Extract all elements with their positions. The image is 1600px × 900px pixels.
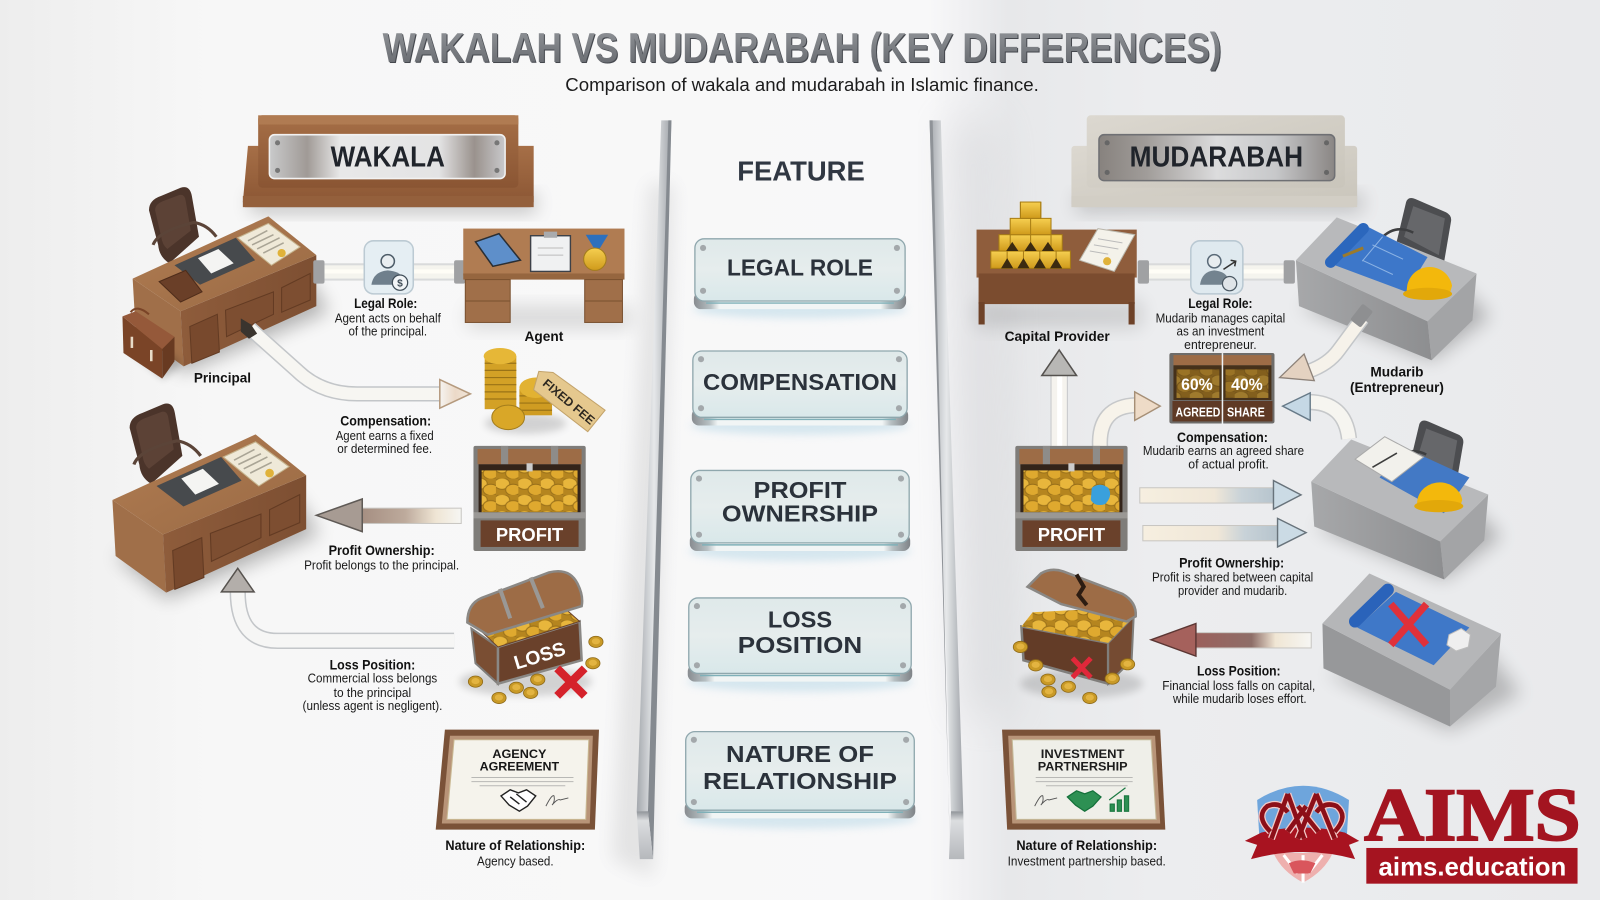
gold bars — [991, 251, 1070, 268]
wakala profit ownership text: Profit belongs to the principal. — [304, 557, 459, 572]
wakala legal role text — [335, 296, 441, 339]
arrow: profit to mudarib — [1143, 518, 1306, 547]
wakala legal role text: Agent acts on behalf — [335, 310, 441, 325]
plate: compensation: COMPENSATION — [703, 369, 897, 395]
mudarabah nature of relationship text — [1008, 838, 1166, 868]
AIMS logo — [1245, 774, 1581, 884]
website badge — [1366, 848, 1578, 884]
mudarib desk: profit — [1311, 421, 1501, 580]
wakala loss position text — [303, 657, 442, 713]
capital provider label: Capital Provider — [1005, 329, 1110, 344]
wakala loss position text: Commercial loss belongs — [308, 671, 437, 686]
arrow: profit to principal — [316, 499, 461, 532]
agreed share chest: 60% — [1181, 376, 1213, 394]
plate: loss position — [687, 598, 913, 692]
wakala profit ownership text — [304, 543, 459, 572]
mudarabah legal role text: Mudarib manages capital — [1156, 310, 1285, 325]
investment partnership certificate — [1002, 730, 1165, 830]
agreed share chest: SHARE — [1227, 404, 1265, 419]
mudarabah compensation text: Compensation: — [1177, 430, 1268, 445]
profit chest — [1015, 446, 1128, 551]
signature — [546, 796, 568, 806]
mudarabah compensation text — [1143, 430, 1304, 471]
wakala compensation text — [336, 414, 434, 456]
loss chest: LOSS — [511, 638, 568, 674]
investment partnership certificate: INVESTMENT — [1041, 747, 1125, 761]
signature — [1035, 796, 1057, 806]
arrow: profit to agreed share — [1100, 392, 1160, 447]
left steel rail — [612, 120, 673, 878]
wakala legal role text: Legal Role: — [354, 296, 417, 311]
glass connector pipe: principal to agent — [313, 260, 465, 284]
plate: profit ownership: PROFIT — [754, 477, 847, 503]
principal desk with chair — [133, 187, 329, 372]
feature heading: FEATURE — [737, 156, 865, 187]
plate: profit ownership — [689, 470, 911, 561]
panel: mudarabah — [977, 115, 1520, 868]
plate: profit ownership: OWNERSHIP — [722, 500, 878, 526]
mudarabah loss position text — [1162, 664, 1315, 706]
loss chest — [459, 571, 603, 704]
arrow: principal to fixed fee — [241, 318, 470, 408]
principal label: Principal — [194, 371, 251, 386]
mudarabah legal role text: Legal Role: — [1188, 296, 1253, 311]
icon: mudarib with growth arrow — [1191, 241, 1243, 294]
plate: nature of relationship: NATURE OF — [726, 741, 874, 767]
mudarabah loss position text: Financial loss falls on capital, — [1162, 678, 1315, 693]
wakala loss position text: (unless agent is negligent). — [303, 698, 442, 713]
wakala compensation text: Agent earns a fixed — [336, 428, 434, 443]
mudarabah nature of relationship text: Investment partnership based. — [1008, 853, 1166, 868]
agent label: Agent — [524, 329, 564, 344]
AIMS wordmark: AIMS — [1364, 774, 1581, 857]
icon: agent with dollar badge — [364, 241, 413, 294]
document tray — [159, 270, 202, 302]
agency agreement certificate: AGREEMENT — [480, 759, 560, 773]
plate: legal role: LEGAL ROLE — [727, 255, 873, 281]
mudarabah compensation text: of actual profit. — [1188, 456, 1269, 471]
agency agreement certificate — [436, 730, 599, 830]
fixed fee coins and tag: FIXED FEE — [540, 376, 597, 428]
mudarabah nature of relationship text: Nature of Relationship: — [1016, 838, 1157, 853]
plate: nature of relationship: RELATIONSHIP — [703, 768, 897, 794]
plate: compensation — [691, 351, 909, 435]
mudarabah loss position text: Loss Position: — [1197, 664, 1281, 679]
mudarabah legal role text — [1156, 296, 1285, 352]
plate: legal role — [693, 239, 907, 318]
mudarabah legal role text: entrepreneur. — [1184, 337, 1257, 352]
capital provider desk with gold — [977, 202, 1142, 328]
panel: feature column — [612, 120, 964, 878]
icon: agent with dollar badge: $ — [397, 279, 403, 290]
panel: wakala — [112, 115, 631, 868]
mudarabah profit ownership text: Profit is shared between capital — [1152, 570, 1313, 585]
arrow: profit to capital provider — [1140, 481, 1301, 509]
wakala nature of relationship text: Nature of Relationship: — [445, 838, 585, 853]
agent desk — [463, 229, 631, 329]
mudarib label — [1350, 365, 1444, 395]
wakala legal role text: of the principal. — [348, 324, 427, 339]
profit chest: PROFIT — [496, 524, 564, 545]
mudarabah stone nameplate — [1071, 115, 1362, 212]
mudarib desk with blueprint — [1296, 198, 1490, 360]
wakala loss position text: to the principal — [334, 685, 411, 700]
wakala nature of relationship text: Agency based. — [477, 853, 554, 868]
glass connector pipe: capital provider to mudarib — [1138, 260, 1295, 284]
plate: loss position: POSITION — [738, 632, 862, 658]
title: WAKALAH VS MUDARABAH (KEY DIFFERENCES) — [383, 24, 1221, 71]
website badge: aims.education — [1379, 854, 1566, 882]
right steel rail — [930, 120, 964, 859]
icon: handshake — [501, 790, 536, 811]
plate: nature of relationship — [684, 732, 916, 829]
wakala compensation text: Compensation: — [340, 414, 431, 429]
investment partnership certificate: PARTNERSHIP — [1038, 759, 1128, 773]
agreed share chest: AGREED — [1176, 404, 1221, 419]
mudarabah profit ownership text: Profit Ownership: — [1179, 555, 1284, 570]
arrow: loss to principal — [221, 568, 454, 641]
shield crest — [1245, 786, 1359, 883]
mudarib desk: loss with crossed blueprint — [1322, 573, 1520, 731]
agreed share chest: 40% — [1231, 376, 1263, 394]
mudarabah compensation text: Mudarib earns an agreed share — [1143, 443, 1304, 458]
icon: growth chart — [1109, 788, 1129, 811]
broken loss chest — [1013, 570, 1143, 704]
fixed fee coins and tag — [484, 348, 605, 434]
mudarabah profit ownership text: provider and mudarib. — [1178, 583, 1287, 598]
mudarib label: Mudarib — [1370, 365, 1423, 380]
wakala wooden nameplate — [243, 115, 536, 212]
profit chest: PROFIT — [1038, 524, 1106, 545]
briefcase — [122, 309, 182, 380]
subtitle: Comparison of wakala and mudarabah in Islamic finance. — [565, 74, 1039, 95]
mudarib label: (Entrepreneur) — [1350, 380, 1444, 395]
arrow: mudarib desk to agreed share — [1283, 393, 1349, 439]
wakala compensation text: or determined fee. — [337, 441, 432, 456]
mudarabah legal role text: as an investment — [1177, 324, 1265, 339]
profit chest — [473, 446, 586, 551]
agency agreement certificate: AGENCY — [492, 747, 546, 761]
wakala loss position text: Loss Position: — [330, 657, 415, 672]
mudarabah profit ownership text — [1152, 555, 1313, 598]
agreed share chest — [1169, 353, 1274, 424]
plate: loss position: LOSS — [768, 607, 832, 633]
mudarabah stone nameplate: MUDARABAH — [1130, 141, 1303, 173]
principal desk: profit — [112, 404, 319, 599]
wakala profit ownership text: Profit Ownership: — [329, 543, 435, 558]
arrow: mudarib to agreed share — [1280, 303, 1373, 381]
wakala wooden nameplate: WAKALA — [331, 141, 445, 173]
icon: green handshake — [1067, 791, 1101, 811]
arrow: profit up to capital provider — [1042, 350, 1077, 449]
mudarabah loss position text: while mudarib loses effort. — [1172, 691, 1307, 706]
wakala nature of relationship text — [445, 838, 585, 868]
contract document — [1080, 229, 1135, 271]
arrow: mudarib effort to loss — [1151, 623, 1311, 656]
